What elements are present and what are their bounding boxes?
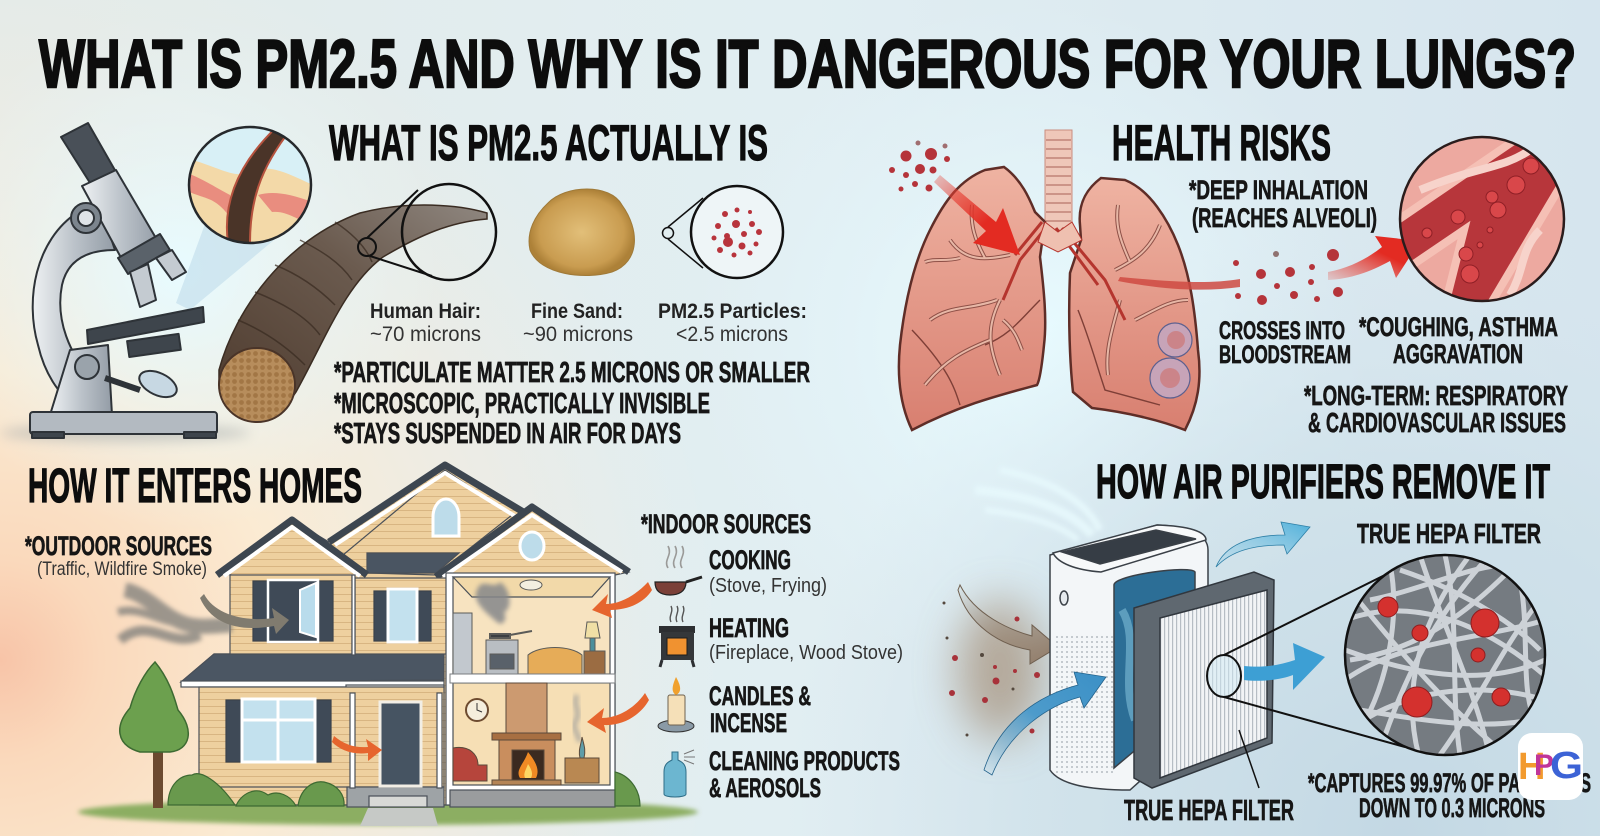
health text: long-term	[1304, 380, 1568, 438]
outdoor sources label	[25, 531, 212, 580]
comparison labels: <2.5 microns	[676, 323, 788, 346]
cooking label: (Stove, Frying)	[709, 575, 827, 597]
particles in bloodstream	[1233, 249, 1343, 305]
arrows: orange entry	[332, 582, 652, 761]
comparison labels	[370, 300, 807, 346]
arrow: dirty air in	[958, 585, 1058, 664]
zoom lens on hair	[358, 184, 496, 280]
smoke: kitchen	[476, 582, 510, 624]
heating label: HEATING	[709, 613, 789, 643]
health text: deep inhalation: (REACHES ALVEOLI)	[1192, 203, 1377, 233]
cooking label: COOKING	[709, 545, 791, 575]
heading: homes: HOW IT ENTERS HOMES	[28, 460, 362, 513]
indoor sources heading: *INDOOR SOURCES	[641, 509, 811, 539]
icon: cooking pan	[655, 546, 702, 595]
heating label: (Fireplace, Wood Stove)	[709, 642, 903, 664]
illustration: human hair strand	[219, 205, 487, 422]
health text: coughing: AGGRAVATION	[1393, 339, 1523, 369]
health text: deep inhalation	[1189, 175, 1377, 233]
panel: air purifiers	[942, 456, 1591, 827]
arrow: clean air in	[984, 672, 1106, 775]
bullet list: *MICROSCOPIC, PRACTICALLY INVISIBLE	[334, 388, 710, 420]
house: upper room	[453, 580, 605, 674]
house: windows and door	[226, 499, 544, 786]
smoke: incense	[574, 695, 579, 742]
illustration: house	[181, 465, 629, 807]
comparison labels: Human Hair:	[370, 300, 481, 323]
panel: health risks	[889, 115, 1570, 438]
cooking label	[709, 545, 827, 597]
captures text	[1308, 768, 1591, 823]
floor divider	[450, 674, 615, 683]
logo badge: G	[1550, 745, 1583, 787]
arrow: smoke through window	[200, 594, 289, 634]
illustration: lungs	[899, 130, 1199, 430]
lens and leader lines	[1207, 565, 1405, 788]
comparison labels: Fine Sand:	[531, 300, 623, 323]
bullet list	[334, 357, 810, 450]
particles entering lungs	[889, 140, 950, 192]
icon: fine sand grain	[529, 189, 634, 276]
outdoor sources label: *OUTDOOR SOURCES	[25, 531, 212, 561]
arrow: inhalation	[934, 175, 1020, 255]
logo badge: H	[1518, 746, 1545, 788]
comparison labels: ~90 microns	[523, 323, 633, 346]
arrow: into vessel	[1328, 236, 1420, 280]
heading: health risks: HEALTH RISKS	[1112, 115, 1331, 171]
inset: filter fibres with trapped particles	[1345, 555, 1550, 760]
health text: bloodstream: CROSSES INTO	[1219, 317, 1345, 345]
health text: coughing	[1359, 312, 1558, 369]
logo badge: P	[1534, 749, 1554, 782]
cleaning label	[709, 746, 900, 803]
cleaning label: CLEANING PRODUCTS	[709, 746, 900, 776]
illustration: purifier body	[1050, 525, 1208, 790]
arrow: filter to inset	[1244, 643, 1325, 690]
panel: how it enters homes	[25, 460, 903, 826]
icon: microscope	[0, 123, 280, 442]
comparison labels: PM2.5 Particles:	[658, 300, 807, 323]
candles label: INCENSE	[710, 708, 787, 738]
icon: wood stove	[659, 606, 695, 667]
icon: hair follicle inset	[188, 126, 312, 244]
arrow: to bloodstream	[1118, 277, 1240, 290]
health text: deep inhalation: *DEEP INHALATION	[1189, 175, 1368, 205]
bullet list: *STAYS SUSPENDED IN AIR FOR DAYS	[334, 418, 681, 450]
cleaning label: & AEROSOLS	[709, 773, 821, 803]
candles label: CANDLES &	[709, 681, 811, 711]
logo badge	[1518, 733, 1583, 800]
health text: bloodstream: BLOODSTREAM	[1219, 341, 1351, 369]
outdoor sources label: (Traffic, Wildfire Smoke)	[37, 559, 207, 580]
wind above purifier	[975, 470, 1100, 540]
illustration: HEPA filter	[1134, 572, 1274, 788]
inset: blood vessel	[1395, 137, 1570, 305]
bushes	[168, 772, 640, 806]
heading: what is PM2.5: WHAT IS PM2.5 ACTUALLY IS	[329, 115, 768, 171]
bullet list: *PARTICULATE MATTER 2.5 MICRONS OR SMALLER	[334, 357, 810, 389]
icon: aerosol can	[664, 750, 695, 797]
heating label	[709, 613, 903, 664]
outdoor smoke	[118, 590, 232, 640]
icon: PM2.5 particles lens	[662, 186, 783, 278]
panel: what PM2.5 is	[0, 115, 810, 450]
icon: candle	[658, 677, 694, 732]
health text: bloodstream	[1219, 317, 1351, 369]
candles label	[709, 681, 811, 738]
arrow: clean air out top	[1216, 522, 1310, 567]
comparison labels: ~70 microns	[370, 323, 481, 346]
dust haze and particles	[942, 600, 1042, 740]
house: lower room	[453, 683, 599, 785]
label: true hepa filter bottom: TRUE HEPA FILTER	[1124, 795, 1294, 827]
illustration: ground and tree	[78, 662, 698, 826]
